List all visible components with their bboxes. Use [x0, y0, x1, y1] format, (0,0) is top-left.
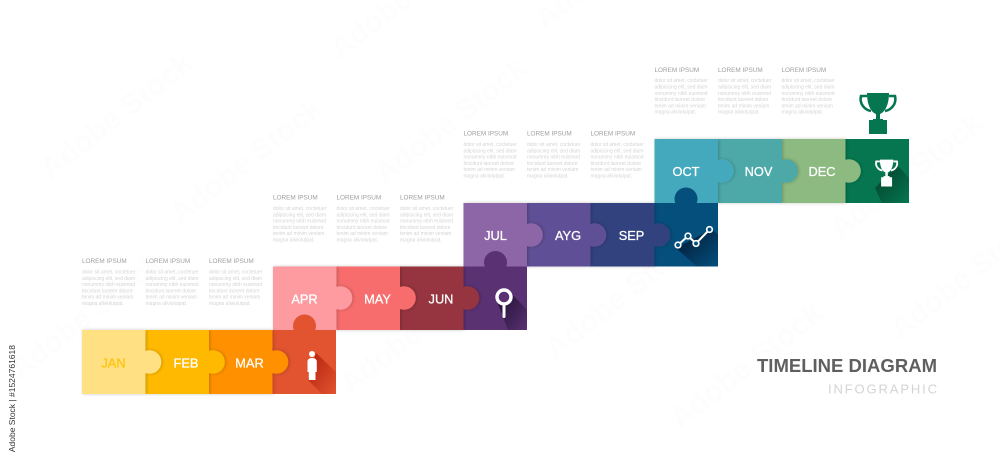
text: April note: adipiscing elit, sed diam [273, 212, 326, 218]
text: July note: adipiscing elit, sed diam [464, 148, 517, 154]
text: September note: tincidunt laoreet dolore [590, 161, 641, 167]
text: August note: tincidunt laoreet dolore [527, 161, 578, 167]
block: DEC icon tile [846, 139, 909, 203]
text: January note: magna aliviolutpat. [82, 301, 124, 307]
text: November note: tincidunt laoreet dolore [718, 97, 769, 103]
text: May note: tincidunt laoreet dolore [336, 225, 387, 231]
text: September note: LOREM IPSUM [590, 130, 635, 138]
block: JAN [82, 330, 161, 394]
text blocks: row 1 (January to March) [82, 258, 263, 307]
text: September note [590, 130, 644, 179]
block: JUN: JUN [429, 292, 453, 306]
text: October note: nonummy nibh euismod [654, 91, 708, 97]
title [757, 355, 937, 396]
text: June note: dolor sit amet, coctetuer [400, 206, 454, 212]
text: April note: dolor sit amet, coctetuer [273, 206, 327, 212]
text: March note: magna aliviolutpat. [209, 301, 251, 307]
block: OCT icon tile [654, 188, 718, 266]
text: February note: dolor sit amet, coctetuer [146, 270, 199, 276]
text: August note [527, 130, 581, 179]
icon: line chart [675, 227, 712, 248]
block: JUL: JUL [484, 228, 507, 243]
text: March note: adipiscing elit, sed diam [209, 276, 262, 282]
text: May note [336, 194, 390, 243]
text blocks: row 4 (October to December) [654, 67, 835, 116]
text: December note: tincidunt laoreet dolore [782, 97, 832, 103]
text: November note: adipiscing elit, sed diam [718, 84, 771, 90]
text blocks: row 3 (July to September) [464, 130, 644, 179]
text: July note: tenim ad minim veniam [464, 167, 515, 173]
block: SEP: SEP [619, 228, 644, 243]
text: September note: tenim ad minim veniam [590, 167, 642, 173]
text: August note: magna aliviolutpat. [527, 173, 569, 179]
text: March note: tincidunt laoreet dolore [209, 288, 260, 294]
text: April note: tenim ad minim veniam [273, 231, 324, 237]
block: APR: APR [291, 292, 318, 306]
text: April note: nonummy nibh euismod [273, 218, 326, 224]
text: October note: magna aliviolutpat. [654, 110, 696, 116]
text: October note: tincidunt laoreet dolore [654, 97, 705, 103]
text: January note: tincidunt laoreet dolore [82, 288, 133, 294]
text: August note: nonummy nibh euismod [527, 154, 580, 160]
icon: person [308, 351, 317, 380]
block: NOV [718, 139, 798, 203]
text: November note: dolor sit amet, coctetuer [718, 78, 772, 84]
block: JAN: JAN [101, 356, 126, 370]
text: October note: tenim ad minim veniam [654, 103, 706, 109]
text: May note: nonummy nibh euismod [336, 218, 390, 224]
text: September note: nonummy nibh euismod [590, 154, 644, 160]
text: April note: magna aliviolutpat. [273, 237, 315, 243]
text: September note: dolor sit amet, coctetuer [590, 142, 644, 148]
text: March note: tenim ad minim veniam [209, 294, 260, 300]
block: DEC [782, 139, 861, 203]
text: June note: LOREM IPSUM [400, 194, 445, 202]
text: February note: nonummy nibh euismod [146, 282, 199, 288]
text: July note: nonummy nibh euismod [464, 154, 517, 160]
text: July note: dolor sit amet, coctetuer [464, 142, 517, 148]
block: DEC: DEC [808, 164, 836, 179]
text: January note: tenim ad minim veniam [82, 294, 133, 300]
block: JUL icon tile [464, 251, 527, 330]
title: TIMELINE DIAGRAM [757, 355, 937, 376]
text: August note: dolor sit amet, coctetuer [527, 142, 581, 148]
text: June note: magna aliviolutpat. [400, 237, 442, 243]
text: December note [782, 67, 835, 116]
text: October note: dolor sit amet, coctetuer [654, 78, 708, 84]
row 3 puzzle: July to September [464, 188, 718, 266]
row 1 puzzle: January to March [82, 314, 336, 394]
block: OCT: OCT [672, 164, 700, 179]
block: NOV: NOV [745, 164, 773, 179]
text: February note [146, 258, 199, 307]
text: December note: LOREM IPSUM [782, 67, 826, 74]
text: July note: tincidunt laoreet dolore [464, 161, 514, 167]
text: February note: tenim ad minim veniam [146, 294, 197, 300]
row 2 puzzle: April to June [273, 251, 527, 330]
text: April note: LOREM IPSUM [273, 194, 318, 202]
block: APR [273, 266, 352, 330]
text: May note: tenim ad minim veniam [336, 231, 388, 237]
block: AYG [527, 203, 606, 266]
text: February note: LOREM IPSUM [146, 258, 190, 265]
text: January note: adipiscing elit, sed diam [82, 276, 135, 282]
icon: magnifier [497, 290, 511, 318]
text: January note: LOREM IPSUM [82, 258, 127, 265]
text: January note [82, 258, 136, 307]
text: July note: magna aliviolutpat. [464, 173, 505, 179]
text: November note: nonummy nibh euismod [718, 91, 771, 97]
text: November note: tenim ad minim veniam [718, 103, 769, 109]
text: April note: tincidunt laoreet dolore [273, 225, 324, 231]
text: December note: nonummy nibh euismod [782, 91, 835, 97]
text: December note: magna aliviolutpat. [782, 110, 823, 116]
text: March note [209, 258, 263, 307]
text blocks: row 2 (April to June) [273, 194, 454, 243]
text: February note: adipiscing elit, sed diam [146, 276, 199, 282]
text: May note: adipiscing elit, sed diam [336, 212, 390, 218]
icon: large green trophy [861, 93, 895, 134]
block: MAY [336, 266, 416, 330]
block: FEB [146, 330, 225, 394]
text: July note [464, 130, 517, 179]
text: August note: LOREM IPSUM [527, 130, 572, 138]
text: April note [273, 194, 327, 243]
text: September note: magna aliviolutpat. [590, 173, 632, 179]
block: JUN [400, 266, 479, 330]
text: March note: nonummy nibh euismod [209, 282, 262, 288]
stock credit: Adobe Stock | #1524761618 [7, 345, 17, 452]
text: May note: magna aliviolutpat. [336, 237, 378, 243]
text: March note: dolor sit amet, coctetuer [209, 270, 263, 276]
block: MAY: MAY [364, 292, 391, 306]
text: May note: LOREM IPSUM [336, 194, 381, 202]
text: November note: LOREM IPSUM [718, 67, 763, 74]
subtitle: INFOGRAPHIC [828, 382, 937, 396]
text: November note [718, 67, 772, 116]
row 4 puzzle: October to December [654, 139, 909, 203]
text: July note: LOREM IPSUM [464, 130, 508, 138]
text: January note: dolor sit amet, coctetuer [82, 270, 136, 276]
text: February note: tincidunt laoreet dolore [146, 288, 196, 294]
text: October note: LOREM IPSUM [654, 67, 699, 74]
block: APR icon tile [272, 314, 336, 394]
block: OCT [654, 139, 734, 203]
text: September note: adipiscing elit, sed diam [590, 148, 644, 154]
text: June note: adipiscing elit, sed diam [400, 212, 453, 218]
block: JUL [464, 203, 543, 266]
block: MAR: MAR [235, 356, 264, 370]
text: August note: tenim ad minim veniam [527, 167, 578, 173]
block: FEB: FEB [174, 356, 198, 370]
text: June note: nonummy nibh euismod [400, 218, 453, 224]
text: October note: adipiscing elit, sed diam [654, 84, 708, 90]
block: SEP [590, 203, 670, 266]
text: December note: tenim ad minim veniam [782, 103, 833, 109]
block: AYG: AYG [555, 228, 581, 243]
text: December note: adipiscing elit, sed diam [782, 84, 835, 90]
text: June note [400, 194, 454, 243]
text: December note: dolor sit amet, coctetuer [782, 78, 835, 84]
text: August note: adipiscing elit, sed diam [527, 148, 580, 154]
text: January note: nonummy nibh euismod [82, 282, 135, 288]
text: March note: LOREM IPSUM [209, 258, 254, 265]
text: May note: dolor sit amet, coctetuer [336, 206, 390, 212]
text: June note: tincidunt laoreet dolore [400, 225, 451, 231]
text: February note: magna aliviolutpat. [146, 301, 187, 307]
block: MAR [209, 330, 288, 394]
text: October note [654, 67, 708, 116]
icon: white trophy [876, 160, 897, 186]
text: November note: magna aliviolutpat. [718, 110, 760, 116]
text: June note: tenim ad minim veniam [400, 231, 451, 237]
